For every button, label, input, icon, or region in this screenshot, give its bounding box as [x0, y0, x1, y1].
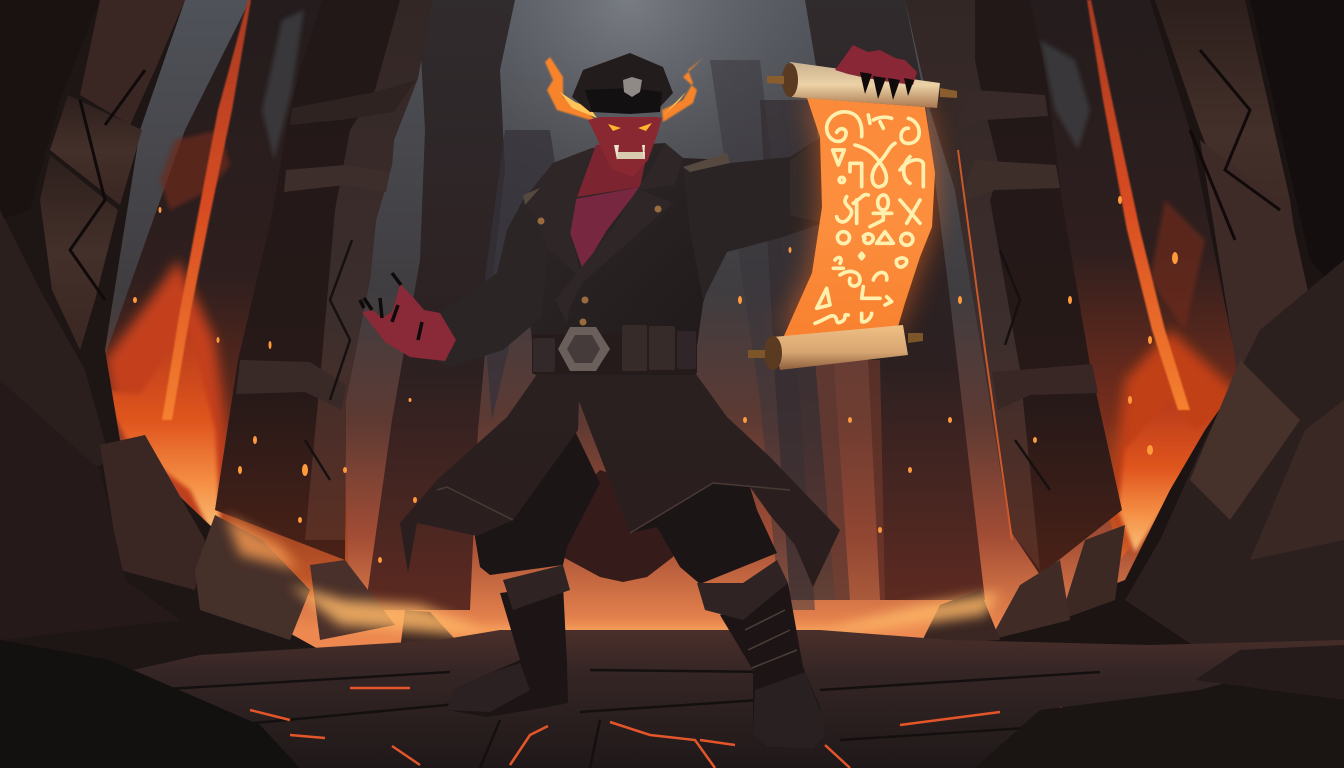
- buttons: [538, 206, 662, 326]
- chasm behind left slab: [100, 0, 425, 620]
- grey fog gaps: [262, 10, 1090, 160]
- belt with hexagon buckle: [532, 325, 697, 374]
- coat skirt: left panel: [400, 370, 580, 573]
- lava streak right: [1087, 0, 1190, 410]
- face: [588, 117, 662, 177]
- stone floor: [0, 630, 1344, 768]
- red smoke patches: [160, 130, 1205, 330]
- top scroll roll: [790, 62, 940, 108]
- rock wall left: [0, 0, 465, 720]
- coat hem lines: [437, 483, 790, 533]
- top roll end cap: [782, 63, 798, 97]
- arm: left: [438, 200, 548, 367]
- epaulettes: [523, 153, 730, 205]
- glowing runes: [815, 112, 923, 323]
- embers: [133, 196, 1178, 563]
- top roll pegs: [767, 76, 957, 98]
- lava cracks in floor: [250, 688, 1120, 768]
- cape lining behind legs: [563, 470, 690, 582]
- claws: [860, 72, 914, 100]
- right boot: [697, 560, 825, 748]
- pillar: left front: [215, 0, 432, 560]
- pillar: right front: [905, 0, 1122, 575]
- right trouser: [620, 440, 777, 584]
- scroll glow halo: [783, 98, 935, 333]
- hand gripping scroll: [835, 45, 917, 85]
- distant pillars: [365, 0, 985, 610]
- left trouser: [475, 427, 600, 575]
- bottom scroll roll: [773, 325, 908, 370]
- coat skirt: right panel: [567, 370, 840, 587]
- bottom roll end cap: [764, 336, 782, 370]
- fire wall right: [1110, 330, 1240, 555]
- bottom roll pegs: [748, 333, 923, 358]
- fire wall left: [100, 260, 232, 545]
- lapels: [533, 143, 683, 323]
- peaked cap: [572, 53, 673, 114]
- eye flames: [545, 57, 703, 122]
- scroll sheet: [783, 98, 935, 338]
- coat torso: [508, 143, 727, 375]
- hand: open clawed: [360, 273, 456, 361]
- low flames at the horizon: [225, 515, 1000, 636]
- chasm behind right slab: [1020, 0, 1250, 560]
- foreground dark rocks: [0, 640, 1344, 768]
- glowing scroll: [748, 45, 957, 370]
- left boot: [447, 565, 570, 717]
- arm: right raised: [683, 138, 823, 300]
- figure: demon officer: [360, 53, 840, 748]
- rock wall right: [920, 0, 1344, 700]
- lava streak left: [162, 0, 251, 420]
- neck and shirt: [570, 140, 650, 270]
